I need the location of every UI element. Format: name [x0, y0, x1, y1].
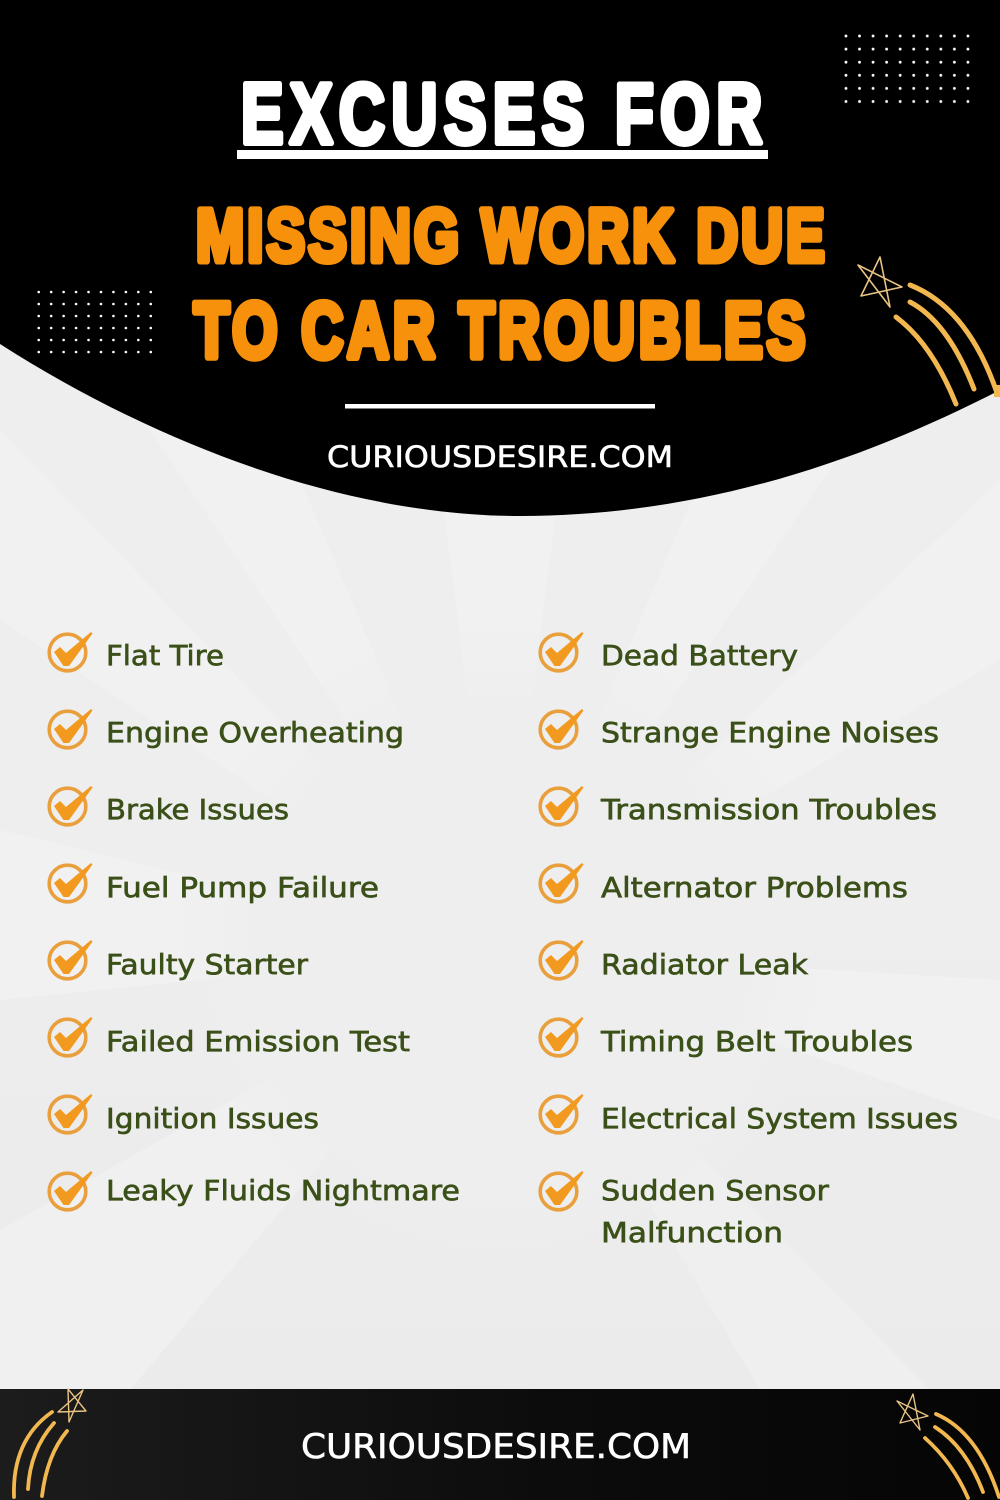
item: engine overheating — [49, 709, 404, 749]
icon: shooting star footer right — [897, 1394, 999, 1498]
item: leaky fluids nightmare — [49, 1171, 460, 1210]
item: sudden sensor malfunction: Sudden Sensor — [601, 1174, 830, 1207]
item: ignition issues: Ignition Issues — [106, 1102, 319, 1135]
footer bar — [0, 1389, 1000, 1500]
item: brake issues: Brake Issues — [106, 793, 289, 826]
item: fuel pump failure — [49, 863, 379, 904]
item: dead battery: Dead Battery — [601, 639, 798, 672]
dot grid: left — [32, 286, 157, 358]
title: excuses for: EXCUSES FOR — [241, 66, 762, 161]
item: sudden sensor malfunction — [540, 1171, 830, 1249]
icon: shooting star footer left — [14, 1389, 86, 1497]
checklist: right column — [540, 632, 958, 1249]
item: brake issues — [49, 786, 289, 826]
item: flat tire — [49, 632, 224, 672]
item: transmission troubles: Transmission Troubles — [600, 793, 937, 826]
item: electrical system issues: Electrical System Issues — [601, 1102, 958, 1135]
item: strange engine noises — [540, 709, 939, 749]
title: missing work due to car troubles: TO CAR TROUBLES — [194, 287, 805, 374]
header black curved panel — [0, 0, 1000, 516]
item: faulty starter: Faulty Starter — [106, 948, 309, 981]
item: leaky fluids nightmare: Leaky Fluids Nightmare — [106, 1174, 460, 1207]
item: fuel pump failure: Fuel Pump Failure — [106, 871, 379, 904]
item: failed emission test: Failed Emission Test — [106, 1025, 410, 1058]
footer website label: CURIOUSDESIRE.COM — [301, 1427, 691, 1467]
item: flat tire: Flat Tire — [106, 639, 224, 672]
website label: CURIOUSDESIRE.COM — [327, 440, 673, 474]
title: missing work due to car troubles — [194, 195, 825, 374]
icon: shooting star top right — [858, 257, 1000, 404]
item: electrical system issues — [540, 1094, 958, 1135]
item: ignition issues — [49, 1094, 319, 1135]
item: sudden sensor malfunction: Malfunction — [601, 1216, 783, 1249]
checklist: left column — [49, 632, 460, 1210]
item: dead battery — [540, 632, 798, 672]
item: timing belt troubles: Timing Belt Troubles — [600, 1025, 913, 1058]
dot grid: top right — [839, 29, 975, 108]
item: failed emission test — [49, 1017, 410, 1058]
item: transmission troubles — [540, 786, 937, 826]
item: engine overheating: Engine Overheating — [106, 716, 404, 749]
title: missing work due to car troubles: MISSING WORK DUE — [196, 195, 825, 278]
item: alternator problems: Alternator Problems — [601, 871, 908, 904]
item: faulty starter — [49, 940, 309, 981]
item: alternator problems — [540, 863, 908, 904]
item: strange engine noises: Strange Engine Noises — [601, 716, 939, 749]
item: radiator leak — [540, 940, 809, 981]
item: radiator leak: Radiator Leak — [601, 948, 809, 981]
divider line — [345, 404, 655, 408]
item: timing belt troubles — [540, 1017, 913, 1058]
